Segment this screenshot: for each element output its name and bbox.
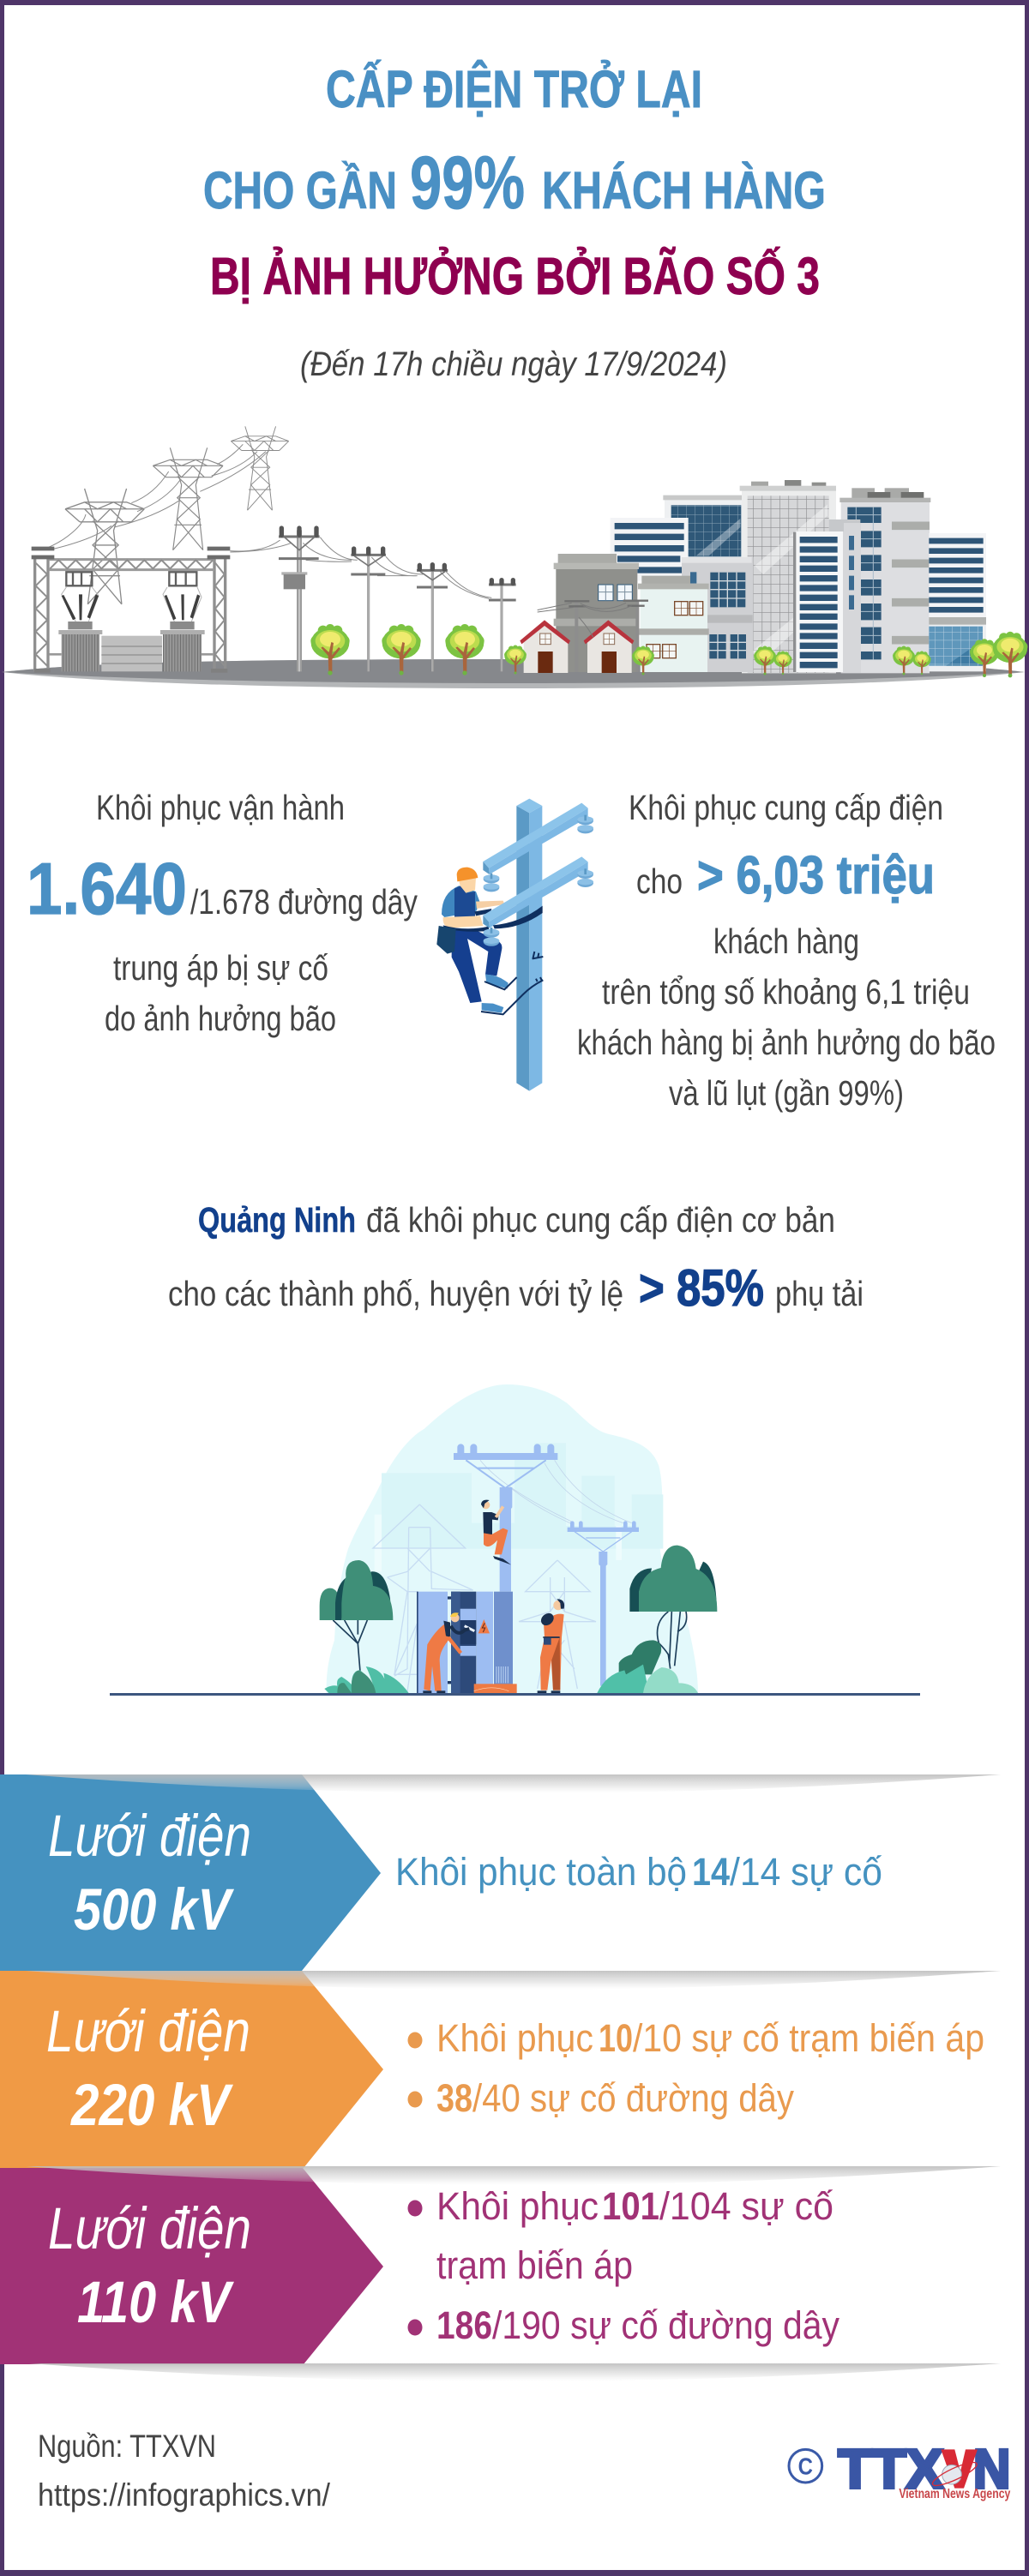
substation and pylons: [32, 426, 491, 673]
ground line: [110, 1693, 920, 1696]
title: 99%: [410, 141, 525, 225]
title: BỊ ẢNH HƯỞNG BỞI BÃO SỐ 3: [210, 247, 820, 305]
text: 500 kV result: 14: [692, 1850, 730, 1894]
left bushes: [324, 1666, 409, 1693]
text: 220 kV results: [408, 2016, 984, 2120]
Quang Ninh statement: đã khôi phục cung cấp điện cơ bản: [366, 1200, 835, 1240]
text: 110 kV results: /104 sự cố: [659, 2184, 833, 2228]
logo: TTXVN: C: [798, 2453, 813, 2480]
utility poles: [279, 528, 516, 671]
illustration: electricians repairing grid: [320, 1384, 717, 1693]
title: KHÁCH HÀNG: [542, 161, 826, 219]
label: Lưới điện 500 kV: [48, 1803, 251, 1943]
text: 220 kV results: 38: [436, 2076, 472, 2120]
left tree: [320, 1560, 393, 1672]
source text: [38, 2429, 331, 2513]
text: 500 kV result: /14 sự cố: [730, 1850, 882, 1894]
right stat text: Khôi phục cung cấp điện: [629, 788, 943, 827]
label: Lưới điện 220 kV: 220 kV: [69, 2072, 233, 2138]
right tree and bushes: [597, 1546, 717, 1693]
icon: lineman climbing pole: [436, 799, 593, 1091]
left stat text: 1.640: [27, 849, 187, 930]
left stat text: Khôi phục vận hành: [96, 788, 345, 827]
big trees: [310, 624, 484, 676]
logo: TTXVN: N: [973, 2438, 1010, 2500]
label: Lưới điện 220 kV: [46, 1998, 250, 2138]
illustration: power grid and city: [2, 426, 1027, 688]
text: 500 kV result: Khôi phục toàn bộ: [395, 1850, 687, 1894]
source text: Nguồn: TTXVN: [38, 2429, 216, 2464]
band: 110 kV: [0, 2166, 1001, 2381]
label: Lưới điện 500 kV: Lưới điện: [48, 1803, 251, 1869]
text: 500 kV result: [395, 1850, 882, 1894]
right stat text: cho: [636, 862, 683, 901]
text: 220 kV results: /10 sự cố trạm biến áp: [633, 2016, 984, 2060]
Quang Ninh statement: Quảng Ninh: [198, 1200, 356, 1240]
text: 110 kV results: trạm biến áp: [436, 2243, 633, 2287]
text: 110 kV results: [408, 2184, 839, 2347]
left stat text: /1.678 đường dây: [190, 882, 418, 922]
date subtitle: (Đến 17h chiều ngày 17/9/2024): [300, 345, 727, 383]
worker climbing: [481, 1500, 511, 1564]
text: 110 kV results: /190 sự cố đường dây: [492, 2303, 839, 2347]
logo: TTXVN: [789, 2438, 1011, 2501]
text: 220 kV results: Khôi phục: [436, 2016, 593, 2060]
background blob: [327, 1384, 698, 1693]
title: CẤP ĐIỆN TRỞ LẠI: [326, 60, 702, 118]
text: 110 kV results: 101: [602, 2184, 659, 2228]
left stat text: trung áp bị sự cố: [113, 948, 328, 988]
worker repairing cabinet: [423, 1612, 469, 1693]
right stat text: khách hàng: [713, 922, 859, 961]
utility poles: [454, 1447, 639, 1686]
Quang Ninh statement: cho các thành phố, huyện với tỷ lệ: [168, 1274, 623, 1313]
ground: [2, 659, 1025, 688]
left stat text: [27, 788, 418, 1038]
Quang Ninh statement: > 85%: [639, 1259, 764, 1317]
electrical cabinet: [417, 1592, 517, 1693]
label: Lưới điện 220 kV: Lưới điện: [46, 1998, 250, 2064]
skyline and pylons: [373, 1443, 663, 1691]
text: 110 kV results: Khôi phục: [436, 2184, 599, 2228]
Quang Ninh statement: [168, 1200, 864, 1317]
band: 220 kV: [0, 1971, 1001, 2168]
right stat text: [577, 788, 996, 1113]
buildings: [520, 480, 986, 673]
right stat text: > 6,03 triệu: [697, 846, 935, 905]
label: Lưới điện 110 kV: 110 kV: [77, 2269, 234, 2335]
label: Lưới điện 110 kV: Lưới điện: [48, 2195, 251, 2261]
label: Lưới điện 110 kV: [48, 2195, 251, 2335]
logo: TTXVN: TTX: [838, 2438, 943, 2500]
source text: https://infographics.vn/: [38, 2477, 331, 2513]
worker supervising: [538, 1599, 564, 1693]
text: 110 kV results: 186: [436, 2303, 492, 2347]
band: 500 kV: [0, 1774, 1001, 1971]
text: 220 kV results: /40 sự cố đường dây: [472, 2076, 794, 2120]
Quang Ninh statement: phụ tải: [775, 1274, 864, 1313]
small trees: [504, 632, 1027, 677]
right stat text: và lũ lụt (gần 99%): [669, 1073, 904, 1113]
title: [203, 60, 826, 305]
label: Lưới điện 500 kV: 500 kV: [74, 1876, 234, 1943]
text: 220 kV results: 10: [599, 2016, 633, 2060]
title: CHO GẦN: [203, 161, 397, 219]
left stat text: do ảnh hưởng bão: [105, 999, 336, 1038]
